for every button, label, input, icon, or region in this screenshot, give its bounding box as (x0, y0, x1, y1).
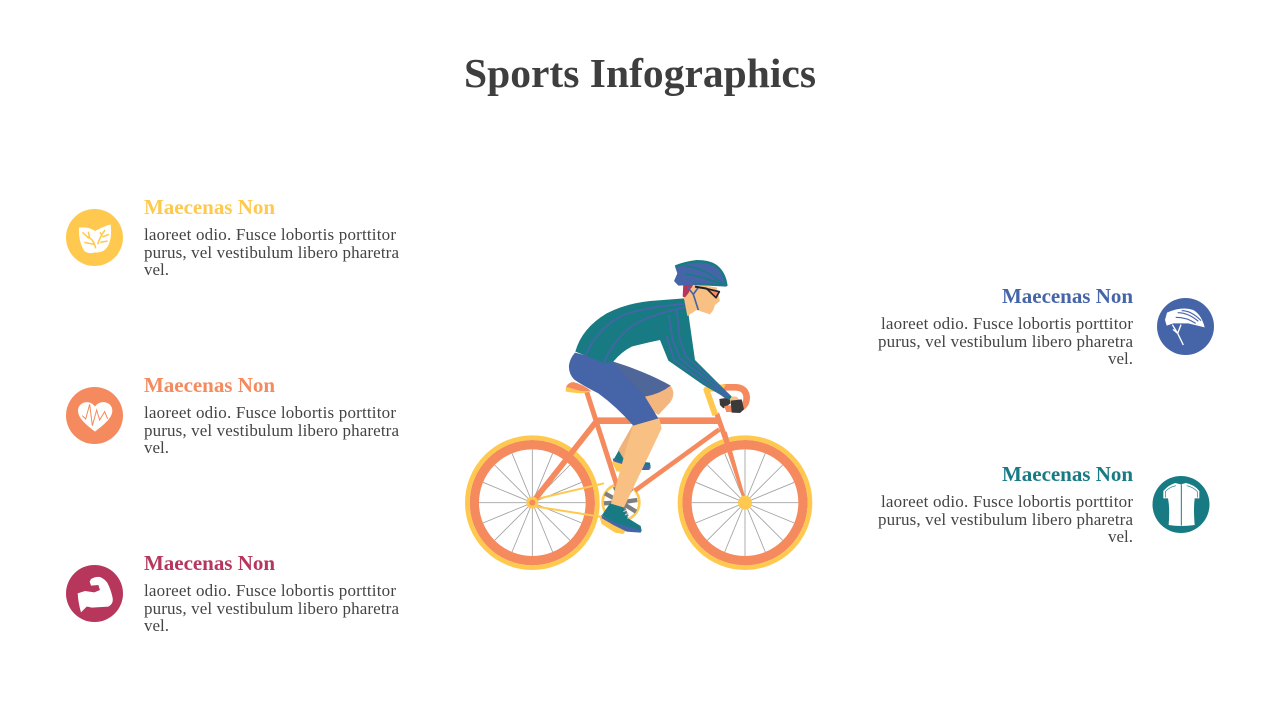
text block: vel. (144, 616, 169, 635)
heading: Maecenas Non (1002, 284, 1133, 308)
panel: item 3 crimson (66, 551, 399, 635)
far thigh (610, 361, 673, 415)
icon: heart (66, 387, 123, 444)
helmet strap (687, 287, 698, 310)
rear wheel (467, 438, 597, 568)
hubs (526, 496, 752, 510)
torso and arm jersey (575, 298, 732, 400)
panel: item 1 yellow (66, 195, 399, 279)
text block: purus, vel vestibulum libero pharetra (878, 510, 1133, 529)
near pedal (599, 513, 627, 534)
icon: lungs (66, 209, 123, 266)
front wheel (680, 438, 810, 568)
text block: vel. (144, 260, 169, 279)
icon: jersey (1152, 476, 1210, 533)
text block (878, 314, 1133, 368)
heading: Maecenas Non (1002, 462, 1133, 486)
chainring (603, 484, 639, 521)
far lower leg (618, 425, 645, 467)
icon: helmet (1157, 298, 1214, 355)
text block (144, 581, 399, 635)
panel: item 5 teal (878, 462, 1210, 546)
text block (144, 225, 399, 279)
head (674, 261, 727, 316)
heading: Maecenas Non (144, 195, 275, 219)
illustration: cyclist on bicycle (467, 261, 810, 568)
head tube accent (706, 388, 715, 415)
near thigh shorts (569, 353, 658, 426)
far pedal and shoe (612, 448, 651, 472)
heading: Maecenas Non (144, 373, 275, 397)
panel: item 4 blue (878, 284, 1214, 368)
near shoe (601, 503, 642, 533)
text block: purus, vel vestibulum libero pharetra (144, 599, 399, 618)
icon: flexed arm (66, 565, 123, 622)
text block: purus, vel vestibulum libero pharetra (878, 332, 1133, 351)
glasses (695, 287, 719, 298)
text block (878, 492, 1133, 546)
near lower leg (611, 418, 662, 507)
hand and glove (717, 393, 744, 413)
text block: laoreet odio. Fusce lobortis porttitor (144, 225, 396, 244)
text block: vel. (1108, 527, 1133, 546)
panel: item 2 orange (66, 373, 399, 457)
title: Sports Infographics (464, 50, 816, 96)
text block: vel. (1108, 349, 1133, 368)
text block: vel. (144, 438, 169, 457)
heading: Maecenas Non (144, 551, 275, 575)
text block: purus, vel vestibulum libero pharetra (144, 421, 399, 440)
chain (532, 483, 604, 517)
text block: laoreet odio. Fusce lobortis porttitor (144, 581, 396, 600)
text block: laoreet odio. Fusce lobortis porttitor (881, 314, 1133, 333)
text block: laoreet odio. Fusce lobortis porttitor (881, 492, 1133, 511)
saddle (566, 382, 592, 393)
text block: purus, vel vestibulum libero pharetra (144, 243, 399, 262)
helmet (674, 261, 727, 287)
text block (144, 403, 399, 457)
bicycle frame (532, 387, 747, 503)
text block: laoreet odio. Fusce lobortis porttitor (144, 403, 396, 422)
